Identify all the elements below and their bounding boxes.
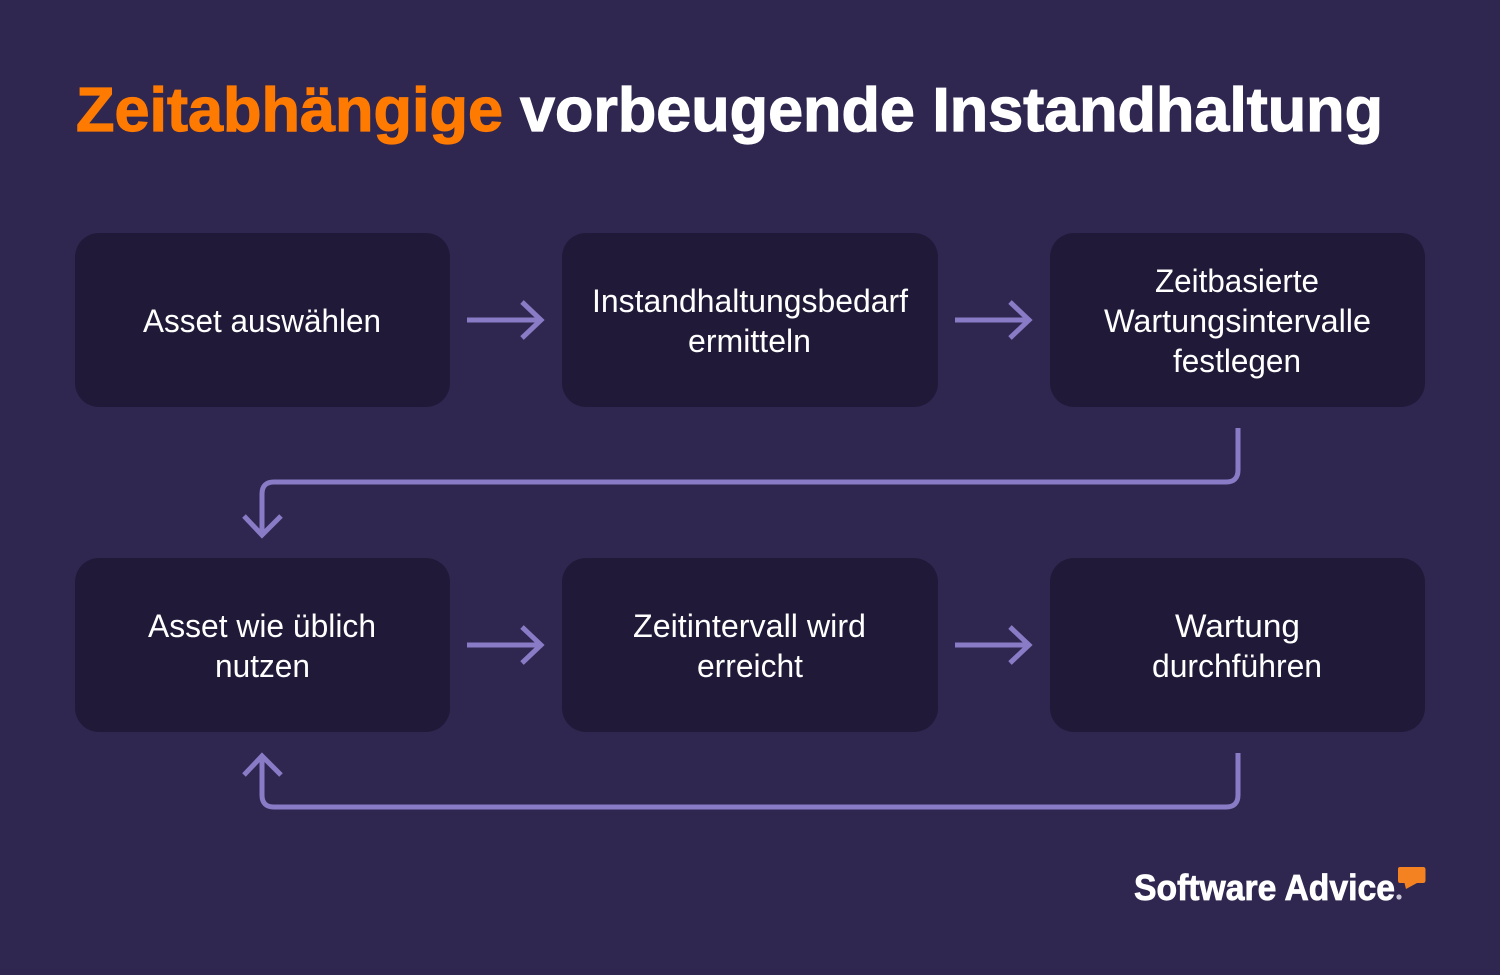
panel: Asset wie üblich nutzen [75,558,450,732]
panel: Instandhaltungsbedarf ermitteln [562,233,938,407]
title: vorbeugende Instandhaltung [520,76,1383,145]
panel: Asset wie üblich nutzen: nutzen [215,648,310,684]
panel: Asset auswählen: Asset auswählen [143,303,381,339]
title [76,76,1383,145]
panel: Wartung durchführen: Wartung [1175,608,1300,644]
logo: Software Advice: Software Advice [1134,867,1395,908]
arrow: step 5 to 6 [955,627,1029,663]
panel: Zeitbasierte Wartungsintervalle festlegen: Wartungsintervalle [1104,303,1371,339]
arrow: step 1 to 2 [467,302,541,338]
arrow: step 6 back to step 4 [244,753,1238,807]
panel: Asset auswählen [75,233,450,407]
panel: Zeitintervall wird erreicht [562,558,938,732]
title: Zeitabhängige [76,76,503,145]
panel: Zeitintervall wird erreicht: Zeitintervall wird [633,608,866,644]
panel: Zeitbasierte Wartungsintervalle festlegen: Zeitbasierte [1155,263,1319,299]
panel: Zeitintervall wird erreicht: erreicht [697,648,803,684]
arrow: step 2 to 3 [955,302,1029,338]
arrow: step 3 down to step 4 [244,428,1238,535]
arrow: step 4 to 5 [467,627,541,663]
panel: Wartung durchführen: durchführen [1152,648,1322,684]
panel: Wartung durchführen [1050,558,1425,732]
panel: Zeitbasierte Wartungsintervalle festlegen [1050,233,1425,407]
panel: Asset wie üblich nutzen: Asset wie üblich [148,608,376,644]
panel: Zeitbasierte Wartungsintervalle festlegen: festlegen [1173,343,1301,379]
panel: Instandhaltungsbedarf ermitteln: ermitteln [688,323,811,359]
panel: Instandhaltungsbedarf ermitteln: Instandhaltungsbedarf [592,283,908,319]
